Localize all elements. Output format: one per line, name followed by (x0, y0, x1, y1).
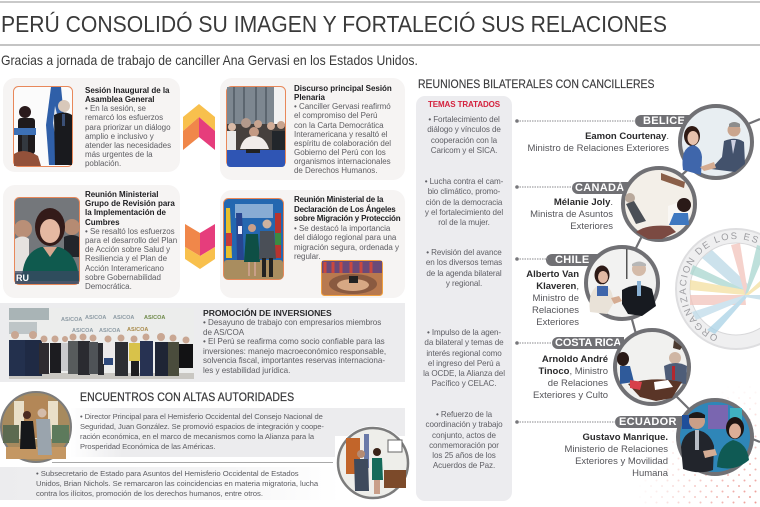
heading: reuniones bilaterales: REUNIONES BILATERALES CON CANCILLERES (418, 77, 654, 91)
text: discurso principal: Gobierno del Perú con los (294, 148, 386, 157)
title rule (0, 44, 760, 46)
text: tema 3 (426, 248, 502, 288)
text: Gustavo Manrique (564, 432, 668, 479)
text: tema 1: • Fortalecimiento del (428, 115, 500, 124)
text: tema 5: los 25 años de los (432, 451, 496, 460)
text: promoción de inversiones (203, 318, 386, 374)
text: Brian Nichols: contra los ilícitos, promoción de los derechos humanos, entre otros. (36, 489, 263, 498)
text: Juan González: Seguridad, Juan González. Se promovió espacios de integración y coope- (80, 422, 324, 430)
panel: discurso principal (220, 78, 405, 180)
photo: sala de conferencia (321, 260, 383, 296)
text: discurso principal: el compromiso del Perú (294, 111, 377, 120)
text: sesión inaugural: más urgentes de la (85, 150, 152, 159)
text: Brian Nichols (36, 469, 318, 498)
panel: temas tratados (416, 96, 512, 501)
text: reunión ministerial cumbres: Acción Interamericano (85, 264, 164, 273)
heading: encuentros: ENCUENTROS CON ALTAS AUTORIDADES (80, 390, 294, 404)
text: tema 2: rol de la mujer. (438, 218, 490, 227)
text: tema 2: y el fortalecimiento del (425, 208, 503, 217)
pill: Costa Rica: COSTA RICA (555, 337, 621, 349)
photo: grupo AS/COA: AS/COA (61, 317, 82, 323)
text: Gustavo Manrique: Exteriores y Movilidad (575, 456, 668, 467)
text: reunión ministerial cumbres: sobre Gobernabilidad (85, 273, 161, 282)
text: Juan González (80, 412, 324, 450)
text: discurso principal: • Canciller Gervasi reafirmó (294, 102, 391, 111)
icon: chevron up (183, 104, 215, 150)
text: Gustavo Manrique: Humana (632, 468, 668, 479)
text: discurso principal (294, 84, 392, 175)
text: tema 4 (423, 328, 505, 388)
icon: chevron down (185, 224, 215, 269)
panel: promoción de inversiones (0, 303, 405, 382)
photo: reunión ministerial cumbres (14, 197, 80, 285)
pill: Chile (546, 254, 598, 266)
photo: grupo AS/COA: AS/COA (113, 315, 134, 321)
text: reunión ministerial cumbres: Grupo de Revisión para (85, 199, 175, 208)
text: sesión inaugural (85, 86, 171, 168)
panel: sesión inaugural (3, 78, 180, 172)
text: declaración de Los Ángeles: Declaración de Los Ángeles (294, 204, 396, 214)
text: Arnoldo André Tinoco: Arnoldo André (542, 354, 608, 365)
connector lines (631, 119, 760, 442)
text: reunión ministerial cumbres: Reunión Ministerial (85, 190, 158, 199)
text: discurso principal: organismos internacionales (294, 157, 391, 166)
text: promoción de inversiones: • Desayuno de trabajo con empresarios miembros (203, 318, 381, 327)
text: reunión ministerial cumbres: Resiliencia y el Plan de (85, 254, 167, 263)
text: Arnoldo André Tinoco: Exteriores y Culto (533, 390, 608, 401)
text: sesión inaugural: para priorizar un diálogo (85, 123, 171, 132)
text: reunión ministerial cumbres: para el desarrollo del Plan (85, 236, 177, 245)
text: reunión ministerial cumbres (85, 190, 177, 291)
photo: grupo AS/COA: AS/COA (99, 328, 120, 334)
text: tema 1: cooperación con la (431, 136, 497, 145)
text: sesión inaugural: Asamblea General (85, 95, 154, 104)
photo: circular Nichols (336, 426, 410, 500)
text: sesión inaugural: remarcó los esfuerzos (85, 113, 163, 122)
text: tema 4: • Impulso de la agen- (427, 328, 501, 337)
photo: grupo AS/COA: AS/COA (72, 328, 93, 334)
subtitle: Gracias a jornada de trabajo de canciller Ana Gervasi en los Estados Unidos. (1, 53, 418, 68)
photo: reunión ministerial cumbres: RU (16, 273, 29, 283)
panel: encuentros con altas autoridades (0, 390, 410, 500)
text: Gustavo Manrique: Ministerio de Relaciones (564, 444, 668, 455)
text: sesión inaugural: atender las necesidades (85, 141, 171, 150)
text: discurso principal: de Derechos Humanos. (294, 166, 377, 175)
circle photo: Belice (680, 106, 752, 178)
text: tema 5: • Refuerzo de la (436, 410, 492, 419)
text: Arnoldo André Tinoco (533, 354, 608, 401)
photo: discurso principal (226, 86, 286, 167)
circle photo: Chile (586, 247, 658, 319)
leader end points (515, 119, 519, 424)
text: sesión inaugural: • En la sesión, se (85, 104, 146, 113)
circle photo: Costa Rica (615, 330, 689, 404)
decorative seal and dots (515, 104, 760, 504)
text: declaración de Los Ángeles: del diálogo regional para una (294, 233, 396, 242)
dotted leaders (517, 121, 636, 422)
text: tema 4: el ingreso del Perú a (428, 359, 500, 368)
text: tema 2 (425, 177, 503, 227)
text: Mélanie Joly (530, 197, 613, 232)
text: Alberto Van Klaveren (526, 269, 579, 328)
text: tema 1: Caricom y el SICA. (431, 146, 497, 155)
text: Alberto Van Klaveren: Ministro de (533, 293, 579, 304)
text: Brian Nichols: • Subsecretario de Estado para Asuntos del Hemisferio Occidental de Estados (36, 469, 299, 478)
text: promoción de inversiones: les y estabilidad jurídica. (203, 366, 290, 374)
photo: grupo AS/COA: AS/COA (127, 327, 148, 333)
text: declaración de Los Ángeles (294, 195, 400, 261)
text: discurso principal: Interamericana y resaltó el (294, 130, 387, 139)
text: tema 1: diálogo y vínculos de (427, 125, 501, 134)
text: declaración de Los Ángeles: migración segura, ordenada y (294, 242, 399, 252)
text: reunión ministerial cumbres: de Acción sobre Salud y (85, 245, 170, 254)
text: tema 2: bio climático, promo- (428, 187, 500, 196)
text: Alberto Van Klaveren: Klaveren, (536, 281, 579, 292)
text: Gustavo Manrique: Gustavo Manrique. (582, 432, 668, 443)
photo: sesión inaugural (13, 86, 73, 167)
text: Eamon Courtenay: Ministro de Relaciones Exteriores (527, 143, 669, 154)
pill: Chile: CHILE (555, 254, 590, 266)
circle photo: Canadá (623, 168, 695, 240)
text: Alberto Van Klaveren: Alberto Van (526, 269, 579, 280)
text: Alberto Van Klaveren: Exteriores (536, 317, 579, 328)
text: Mélanie Joly: Ministra de Asuntos (530, 209, 613, 220)
text: tema 4: Pacífico y CELAC. (432, 379, 496, 388)
text: tema 3: • Revisión del avance (426, 248, 502, 257)
text: discurso principal: Discurso principal Sesión (294, 84, 392, 93)
photo: declaración de Los Ángeles (223, 198, 284, 280)
photo: grupo AS/COA (9, 308, 194, 379)
photo: grupo AS/COA: AS/COA (144, 315, 165, 321)
text: declaración de Los Ángeles: sobre Migración y Protección (294, 214, 400, 223)
text: Juan González: ración económica, en el marco de mecanismos como la Alianza para la (80, 432, 314, 440)
text: Juan González: Prosperidad Económica de las Américas. (80, 442, 215, 450)
text: tema 2: ción de la democracia (426, 198, 502, 207)
text: tema 5: Acuerdos de Paz. (433, 461, 495, 470)
text: declaración de Los Ángeles: regular. (294, 252, 320, 261)
text: declaración de Los Ángeles: Reunión Ministerial de la (294, 195, 383, 204)
text: discurso principal: espíritu de colaboración del (294, 139, 391, 148)
text: reunión ministerial cumbres: Cumbres (85, 218, 120, 227)
text: Eamon Courtenay (527, 131, 669, 154)
text: tema 5: coordinación y trabajo (426, 420, 502, 429)
photo: circular González (0, 391, 72, 463)
panel: declaración de Los Ángeles (220, 190, 405, 298)
text: tema 4: la OCDE, la Alianza del (423, 369, 505, 378)
text: tema 5 (426, 410, 502, 470)
text: tema 5: conjunto, actos de (432, 431, 496, 440)
text: tema 4: da bilateral y temas de (424, 338, 504, 347)
text: tema 2: • Lucha contra el cam- (425, 177, 503, 186)
text: sesión inaugural: población. (85, 159, 121, 168)
heading: promoción de inversiones: PROMOCIÓN DE INVERSIONES (203, 308, 332, 318)
text: tema 5: conmemoración por (429, 441, 499, 450)
text: Mélanie Joly: Mélanie Joly. (554, 197, 613, 208)
text: tema 4: interés regional como (426, 349, 502, 358)
text: tema 3: de la agenda bilateral (426, 269, 502, 278)
photo: grupo AS/COA: AS/COA (85, 315, 106, 321)
text: reunión ministerial cumbres: Democrática. (85, 282, 132, 291)
text: Eamon Courtenay: Eamon Courtenay. (585, 131, 669, 142)
panel: reunión ministerial cumbres (3, 185, 180, 298)
text: Arnoldo André Tinoco: Tinoco, Ministro (538, 366, 608, 377)
text: promoción de inversiones: de AS/COA (203, 328, 244, 336)
text: reunión ministerial cumbres: • Se resaltó los esfuerzos (85, 227, 175, 236)
text: sesión inaugural: Sesión Inaugural de la (85, 86, 169, 95)
text: discurso principal: Plenaria (294, 93, 325, 102)
text: Mélanie Joly: Exteriores (570, 221, 613, 232)
text: tema 1 (427, 115, 501, 155)
top rule (0, 1, 760, 3)
text: promoción de inversiones: solvencia fiscal, importantes reservas internaciona- (203, 356, 385, 365)
text: tema 3: y regional. (446, 279, 482, 288)
dot pattern (645, 392, 756, 504)
text: promoción de inversiones: • El Perú se reafirma como socio confiable para las (203, 337, 385, 346)
pill: Canadá: CANADÁ (575, 182, 624, 194)
text: tema 3: en los diversos temas (426, 258, 502, 267)
pill: Belice: BELICE (643, 115, 685, 127)
heading: temas tratados: TEMAS TRATADOS (428, 100, 500, 109)
text: reunión ministerial cumbres: la Implementación de (85, 208, 166, 217)
text: discurso principal: con la Carta Democrática (294, 121, 384, 130)
text: Brian Nichols: Unidos, Brian Nichols. Se remarcaron las coincidencias en materia migratoria, lucha (36, 479, 318, 488)
text: sesión inaugural: amplio e inclusivo y (85, 132, 154, 141)
pill: Ecuador: ECUADOR (619, 416, 677, 428)
text: Alberto Van Klaveren: Relaciones (532, 305, 579, 316)
text: Juan González: • Director Principal para el Hemisferio Occidental del Consejo Nacional de (80, 412, 323, 420)
text: declaración de Los Ángeles: • Se destacó la importancia (294, 224, 390, 232)
circle photo: Ecuador (678, 400, 752, 474)
text: promoción de inversiones: inversiones: manejo macroeconómico responsable, (203, 346, 386, 356)
text: Arnoldo André Tinoco: de Relaciones (548, 378, 608, 389)
title: PERÚ CONSOLIDÓ SU IMAGEN Y FORTALECIÓ SUS RELACIONES (1, 11, 667, 37)
